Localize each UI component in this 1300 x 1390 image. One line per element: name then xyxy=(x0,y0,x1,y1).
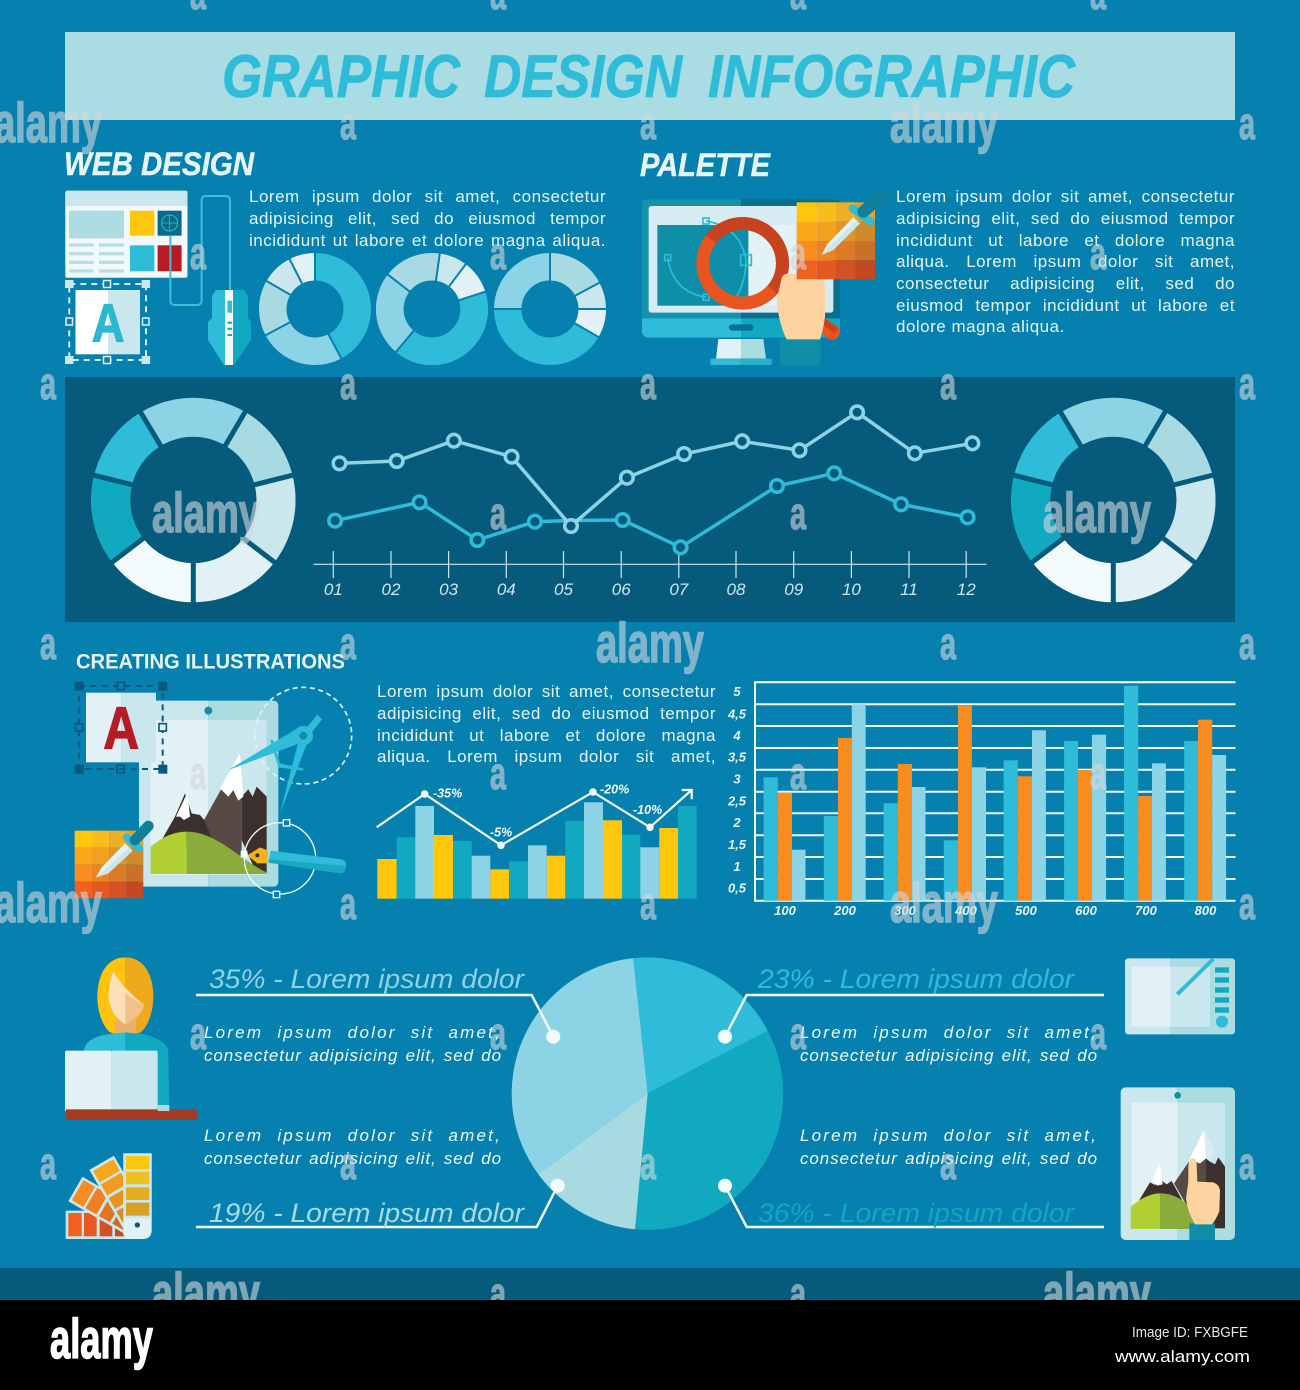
black credit bar xyxy=(0,1300,1300,1390)
stock photo watermarks: alamy xyxy=(152,481,260,544)
stock photo watermarks: a xyxy=(190,1008,207,1059)
chart: grouped bar chart 100 to 800: 700 xyxy=(1135,903,1158,918)
stock photo watermarks: a xyxy=(790,1008,807,1059)
stock photo watermarks: a xyxy=(940,358,957,409)
stock photo watermarks: a xyxy=(490,1268,507,1319)
chart: donut 1 xyxy=(264,252,357,360)
chart: line chart 01 to 12: 10 xyxy=(842,580,861,599)
chart: line chart 01 to 12: 07 xyxy=(669,580,689,599)
stock photo watermarks: alamy xyxy=(1043,1261,1151,1324)
chart: line chart 01 to 12: 08 xyxy=(727,580,746,599)
icon: woman with laptop xyxy=(65,957,197,1120)
chart: small bar chart with percentage trend: -20% xyxy=(600,782,629,796)
chart: grouped bar chart 100 to 800: 3,5 xyxy=(728,750,747,765)
text: creating illustrations paragraph: adipisicing elit, sed do eiusmod tempor xyxy=(377,704,716,723)
stock photo watermarks: a xyxy=(940,1138,957,1189)
chart: small bar chart with percentage trend: -35% xyxy=(433,787,462,801)
stock photo watermarks: a xyxy=(790,748,807,799)
stock photo watermarks: alamy xyxy=(1043,481,1151,544)
icon: pen tablet xyxy=(1125,958,1235,1034)
label: 23 percent: 23% - Lorem ipsum dolor xyxy=(757,964,1075,994)
text: pie note bottom left: Lorem ipsum dolor sit amet, xyxy=(204,1126,502,1145)
text: pie note bottom right: Lorem ipsum dolor sit amet, xyxy=(800,1126,1098,1145)
chart: grouped bar chart 100 to 800: 3 xyxy=(733,772,741,787)
panel: line chart band xyxy=(65,377,1235,622)
text: pie note bottom left: consectetur adipisicing elit, sed do xyxy=(204,1149,502,1168)
chart: small bar chart with percentage trend: -5% xyxy=(490,826,512,840)
text: palette paragraph: dolore magna aliqua. xyxy=(896,317,1065,336)
stock photo watermarks: a xyxy=(340,358,357,409)
stock photo watermarks: a xyxy=(790,488,807,539)
stock photo watermarks: a xyxy=(490,1008,507,1059)
chart: grouped bar chart 100 to 800: 400 xyxy=(954,903,978,918)
title banner: INFOGRAPHIC xyxy=(708,43,1076,110)
stock photo watermarks: a xyxy=(340,878,357,929)
icon: palette monitor, magnifier and swatch xyxy=(642,197,881,365)
stock photo watermarks: a xyxy=(1090,1008,1107,1059)
stock photo watermarks: a xyxy=(1239,878,1256,929)
label: 19 percent: 19% - Lorem ipsum dolor xyxy=(209,1198,525,1228)
text: pie note top left: Lorem ipsum dolor sit amet, xyxy=(204,1023,502,1042)
stock photo watermarks: a xyxy=(340,1138,357,1189)
icon: colour fan swatch xyxy=(66,1153,152,1239)
stock photo watermarks: a xyxy=(640,1138,657,1189)
text: web design paragraph xyxy=(249,187,606,250)
stock photo watermarks: a xyxy=(790,1268,807,1319)
text: pie note top right: Lorem ipsum dolor sit amet, xyxy=(800,1023,1098,1042)
chart: line chart 01 to 12 xyxy=(314,406,986,599)
chart: grouped bar chart 100 to 800: 4 xyxy=(732,728,741,743)
stock photo watermarks: alamy xyxy=(890,871,998,934)
text: palette paragraph: aliqua. Lorem ipsum dolor sit amet, xyxy=(896,252,1235,271)
black credit bar: alamy xyxy=(50,1307,153,1370)
text: web design paragraph: adipisicing elit, sed do eiusmod tempor xyxy=(249,209,606,228)
stock photo watermarks: a xyxy=(1090,748,1107,799)
chart: grouped bar chart 100 to 800: 1 xyxy=(733,859,741,874)
stock photo watermarks: a xyxy=(940,618,957,669)
chart: line chart 01 to 12: 04 xyxy=(497,580,516,599)
chart: grouped bar chart 100 to 800: 200 xyxy=(833,903,857,918)
chart: donut 3 xyxy=(493,252,607,351)
text: palette paragraph: Lorem ipsum dolor sit amet, consectetur xyxy=(896,187,1235,206)
stock photo watermarks: a xyxy=(1239,98,1256,149)
chart: grouped bar chart 100 to 800: 500 xyxy=(1015,903,1038,918)
text: palette paragraph: eiusmod tempor incididunt ut labore et xyxy=(896,296,1235,315)
chart: grouped bar chart 100 to 800: 300 xyxy=(894,903,917,918)
footer band xyxy=(0,1268,1300,1300)
stock photo watermarks: a xyxy=(190,748,207,799)
stock photo watermarks: a xyxy=(490,228,507,279)
icon: creating illustrations tablet, compass, pen and swatch xyxy=(75,682,352,898)
chart: line chart 01 to 12: 02 xyxy=(382,580,401,599)
text: web design paragraph: incididunt ut labore et dolore magna aliqua. xyxy=(249,231,606,250)
stock photo watermarks: a xyxy=(40,1138,57,1189)
stock photo watermarks: a xyxy=(340,98,357,149)
text: web design paragraph: Lorem ipsum dolor sit amet, consectetur xyxy=(249,187,606,206)
stock photo watermarks: a xyxy=(790,228,807,279)
stock photo watermarks: a xyxy=(1239,618,1256,669)
chart: grouped bar chart 100 to 800: 5 xyxy=(733,684,741,699)
text: pie note top left xyxy=(204,1023,502,1065)
text: pie note top right: consectetur adipisicing elit, sed do xyxy=(800,1046,1098,1065)
chart: line chart 01 to 12: 12 xyxy=(957,580,976,599)
text: creating illustrations paragraph xyxy=(377,682,716,766)
stock photo watermarks: a xyxy=(1090,228,1107,279)
title banner xyxy=(65,32,1235,120)
chart: pie chart xyxy=(512,957,783,1230)
stock photo watermarks: alamy xyxy=(890,91,998,154)
text: palette paragraph: incididunt ut labore et dolore magna xyxy=(896,231,1235,250)
text: creating illustrations paragraph: incididunt ut labore et dolore magna xyxy=(377,726,716,745)
stock photo watermarks: a xyxy=(640,358,657,409)
chart: donut 2 xyxy=(386,252,487,353)
title banner: DESIGN xyxy=(484,43,683,110)
chart: line chart 01 to 12: 03 xyxy=(439,580,459,599)
chart: line chart 01 to 12: 01 xyxy=(324,580,343,599)
text: pie note bottom right: consectetur adipisicing elit, sed do xyxy=(800,1149,1098,1168)
label: 36 percent: 36% - Lorem ipsum dolor xyxy=(758,1198,1075,1228)
icon: web design browser, mouse and type box xyxy=(65,191,251,365)
chart: line chart 01 to 12: 06 xyxy=(612,580,631,599)
label: 35 percent: 35% - Lorem ipsum dolor xyxy=(209,964,525,994)
black credit bar: Image ID: FXBGFE xyxy=(1132,1324,1248,1341)
text: palette paragraph: consectetur adipisicing elit, sed do xyxy=(896,274,1235,293)
stock photo watermarks: a xyxy=(40,358,57,409)
chart: line chart 01 to 12: 05 xyxy=(554,580,573,599)
stock photo watermarks: a xyxy=(1239,358,1256,409)
icon: creating illustrations tablet, compass, pen and swatch: A xyxy=(103,695,139,762)
chart: grouped bar chart 100 to 800: 800 xyxy=(1195,903,1217,918)
chart: right band donut xyxy=(1010,407,1217,606)
chart: grouped bar chart 100 to 800: 1,5 xyxy=(728,837,747,852)
stock photo watermarks: a xyxy=(190,228,207,279)
stock photo watermarks: alamy xyxy=(596,611,704,674)
stock photo watermarks: alamy xyxy=(152,1261,260,1324)
stock photo watermarks: a xyxy=(640,878,657,929)
heading: creating illustrations: CREATING ILLUSTRATIONS xyxy=(76,650,345,673)
chart: grouped bar chart 100 to 800: 2,5 xyxy=(727,794,747,809)
chart: grouped bar chart 100 to 800: 2 xyxy=(732,815,741,830)
heading: web design: WEB DESIGN xyxy=(64,146,255,182)
stock photo watermarks: a xyxy=(40,618,57,669)
chart: grouped bar chart 100 to 800: 0,5 xyxy=(728,881,747,896)
chart: grouped bar chart 100 to 800: 600 xyxy=(1075,903,1098,918)
chart: grouped bar chart 100 to 800: 4,5 xyxy=(727,706,747,721)
chart: left band donut xyxy=(90,407,297,606)
stock photo watermarks: a xyxy=(640,98,657,149)
text: palette paragraph xyxy=(896,187,1235,336)
text: creating illustrations paragraph: Lorem ipsum dolor sit amet, consectetur xyxy=(377,682,716,701)
stock photo watermarks: a xyxy=(490,748,507,799)
callout connectors xyxy=(196,995,1104,1227)
chart: grouped bar chart 100 to 800: 100 xyxy=(774,903,797,918)
text: pie note bottom right xyxy=(800,1126,1098,1168)
heading: palette: PALETTE xyxy=(640,147,772,183)
stock photo watermarks: a xyxy=(1239,1138,1256,1189)
chart: line chart 01 to 12: 09 xyxy=(784,580,804,599)
chart: grouped bar chart 100 to 800 xyxy=(727,681,1236,918)
text: pie note bottom left xyxy=(204,1126,502,1168)
text: palette paragraph: adipisicing elit, sed do eiusmod tempor xyxy=(896,209,1235,228)
title banner: GRAPHIC xyxy=(222,43,461,110)
stock photo watermarks: a xyxy=(490,488,507,539)
text: pie note top right xyxy=(800,1023,1098,1065)
chart: small bar chart with percentage trend: -10% xyxy=(633,803,662,817)
chart: line chart 01 to 12: 11 xyxy=(900,580,918,599)
icon: tablet with touch mountain picture xyxy=(1121,1087,1235,1240)
black credit bar: www.alamy.com xyxy=(1114,1347,1250,1366)
text: pie note top left: consectetur adipisicing elit, sed do xyxy=(204,1046,502,1065)
text: creating illustrations paragraph: aliqua. Lorem ipsum dolor sit amet, xyxy=(377,747,716,766)
chart: small bar chart with percentage trend xyxy=(377,782,697,899)
icon: web design browser, mouse and type box: A xyxy=(92,294,124,354)
stock photo watermarks: a xyxy=(340,618,357,669)
